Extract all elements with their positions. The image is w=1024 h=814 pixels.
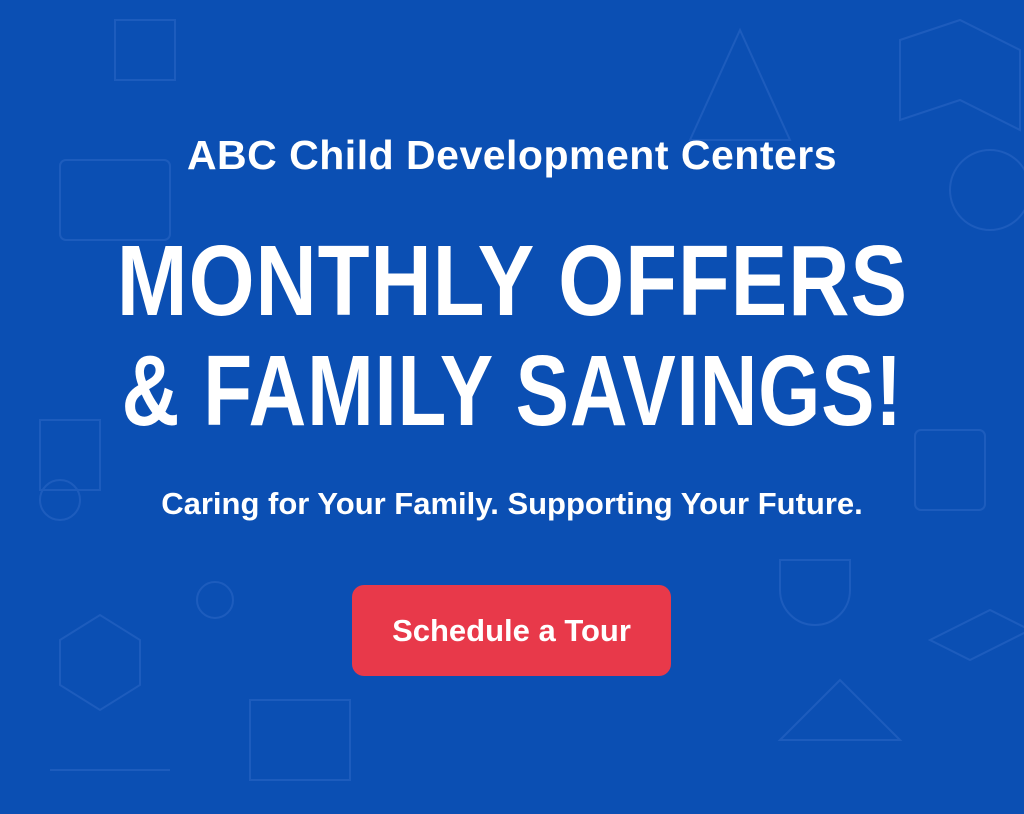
heading: organization name: ABC Child Development Centers	[187, 132, 837, 178]
button: schedule a tour: Schedule a Tour	[392, 613, 631, 648]
button: schedule a tour	[352, 585, 671, 676]
title line 2: & FAMILY SAVINGS!	[121, 335, 903, 447]
title	[116, 225, 908, 447]
tagline: Caring for Your Family. Supporting Your Future.	[161, 486, 863, 521]
title line 1: MONTHLY OFFERS	[116, 225, 908, 337]
